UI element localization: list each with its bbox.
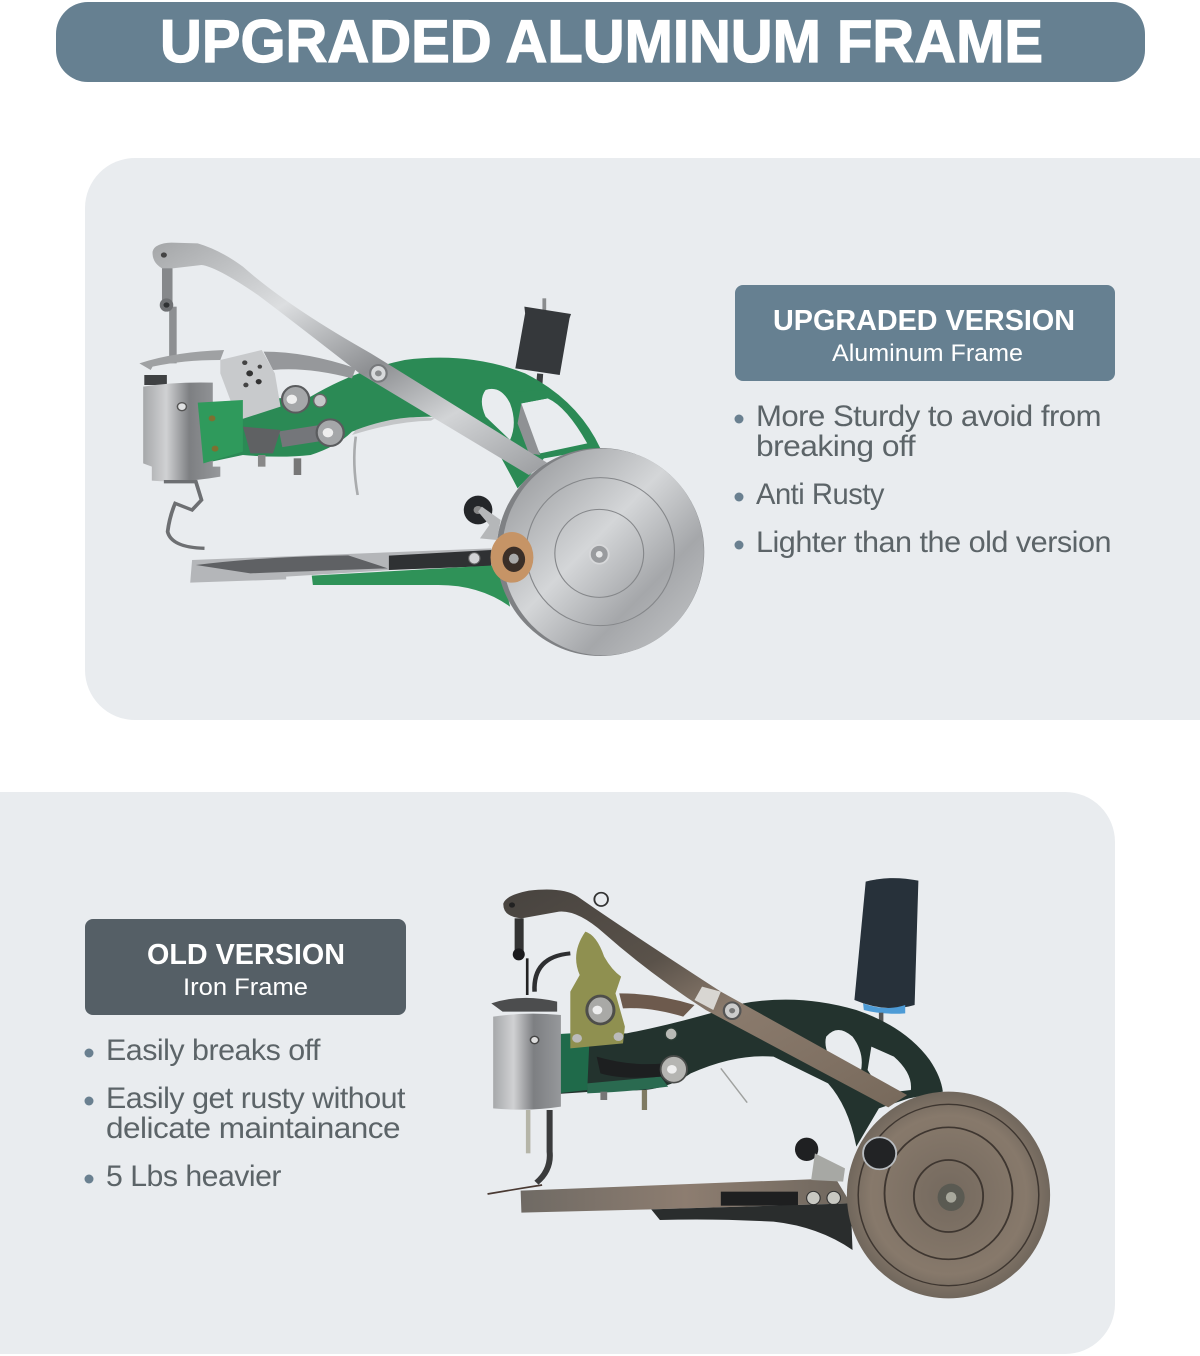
wooden knob	[490, 532, 533, 583]
large disc	[497, 448, 704, 656]
bullet list: old: delicate maintainance	[106, 1112, 400, 1145]
green casting	[198, 358, 600, 488]
title: UPGRADED ALUMINUM FRAME	[160, 8, 1043, 75]
small wheel	[795, 1138, 845, 1182]
head plate	[139, 350, 281, 420]
large iron disc	[847, 1092, 1050, 1298]
hanging thread and screws	[354, 437, 358, 495]
illustration: aluminum frame sewing machine	[139, 243, 704, 656]
label: old version	[85, 919, 406, 1015]
thread spool	[515, 298, 571, 390]
panel: old version	[0, 792, 1115, 1354]
bullet list: old	[84, 1034, 406, 1193]
bullet list: upgraded: More Sturdy to avoid from	[756, 400, 1101, 433]
foot and presser	[164, 455, 301, 548]
green lower arm	[312, 565, 510, 607]
green bracket	[542, 1033, 668, 1095]
dark lower casting	[651, 1203, 853, 1250]
title banner	[56, 2, 1145, 82]
green plate	[198, 400, 243, 463]
bullet list: upgraded: breaking off	[756, 430, 916, 463]
needle bar	[160, 268, 177, 363]
label: old version: Iron Frame	[183, 974, 308, 1001]
panel: upgraded version	[85, 158, 1200, 720]
thread cone	[854, 878, 918, 1034]
bullet list: old: Easily breaks off	[106, 1034, 321, 1067]
tension knobs	[243, 386, 344, 453]
needle bar and hose	[513, 918, 570, 995]
bullet list: upgraded	[734, 400, 1111, 559]
olive head plate	[570, 932, 625, 1048]
cylinder	[143, 375, 220, 481]
bullet list: old: Easily get rusty without	[106, 1082, 406, 1115]
small wheel	[464, 496, 501, 540]
iron lower arm	[521, 1178, 851, 1213]
bullet list: upgraded: Anti Rusty	[756, 478, 884, 511]
lower arm	[190, 548, 497, 583]
foot and needle	[488, 1110, 550, 1194]
bullet list: old: 5 Lbs heavier	[106, 1160, 282, 1193]
iron arm	[503, 890, 907, 1107]
label: upgraded version: Aluminum Frame	[832, 340, 1023, 367]
tension knob	[600, 1028, 747, 1110]
curved link	[264, 352, 356, 378]
illustration: iron frame sewing machine	[488, 878, 1050, 1298]
cylinder	[493, 1014, 561, 1110]
bullet list: upgraded: Lighter than the old version	[756, 526, 1111, 559]
silver arm	[153, 243, 547, 475]
rotary top	[491, 998, 557, 1012]
label: upgraded version: UPGRADED VERSION	[773, 305, 1075, 337]
dark casting	[542, 1000, 943, 1147]
curved link	[619, 993, 694, 1017]
label: old version: OLD VERSION	[147, 939, 345, 971]
label: upgraded version	[735, 285, 1115, 381]
